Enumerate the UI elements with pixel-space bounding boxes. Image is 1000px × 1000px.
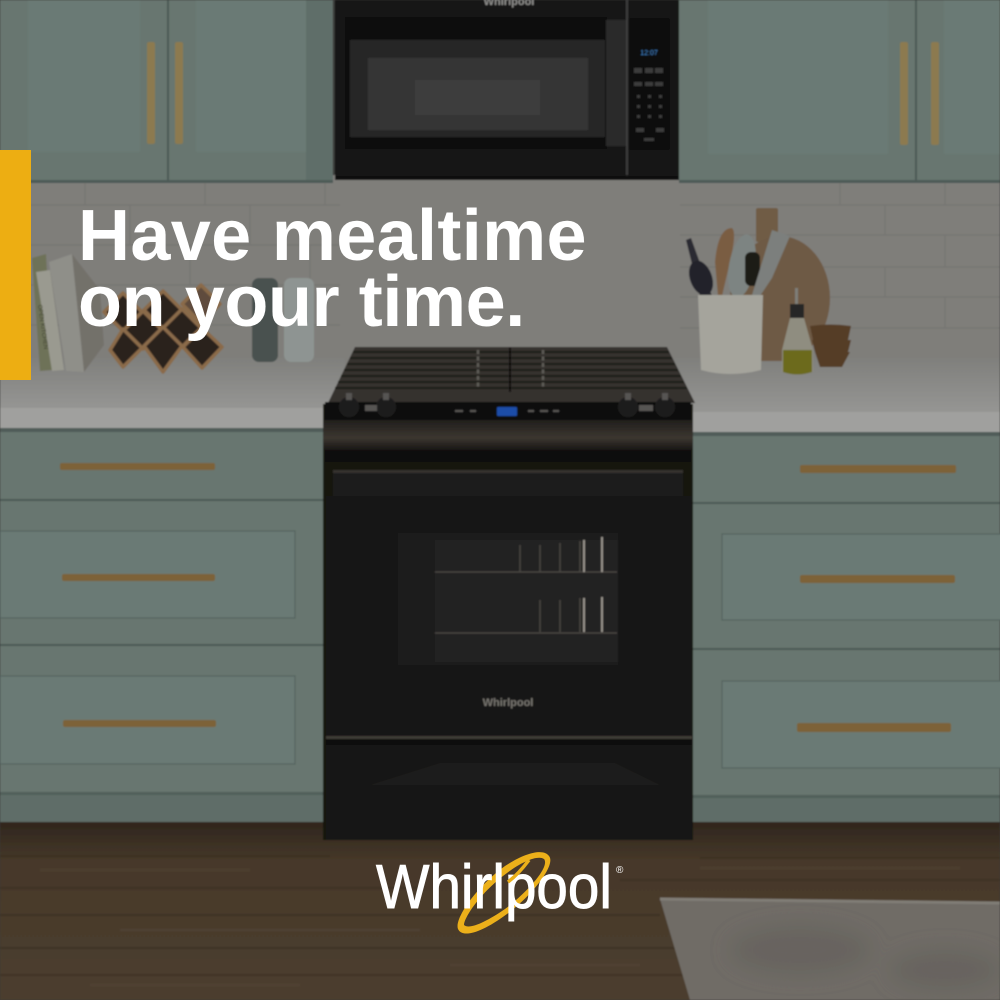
drawer handles [797, 465, 956, 732]
microwave [335, 0, 679, 180]
cooktop grates [328, 347, 695, 403]
salt and pepper mills [252, 278, 314, 362]
oil bottle [782, 288, 813, 374]
oven door logo: Whirlpool [483, 697, 533, 709]
spice rack [104, 285, 222, 372]
right counter items [685, 208, 851, 374]
oven window [398, 533, 618, 665]
left countertop [0, 358, 345, 429]
left lower cabinets [0, 428, 324, 823]
left counter items [32, 254, 314, 372]
logo swoosh back [458, 852, 550, 934]
wood floor [0, 822, 1000, 1000]
wooden bowls [810, 324, 851, 367]
cookbooks: OPEN KITCHEN [36, 304, 48, 350]
right countertop [668, 358, 1000, 432]
range [323, 347, 695, 840]
cabinet handles [147, 42, 183, 144]
registered mark: ® [616, 865, 624, 876]
utensils [685, 228, 790, 300]
backsplash tiles [0, 175, 1000, 375]
microwave window [368, 58, 588, 130]
area rug [660, 899, 1000, 1000]
upper cabinets left [0, 0, 333, 183]
right lower cabinets [692, 432, 1000, 826]
yellow accent bar [0, 150, 31, 380]
upper cabinets right [679, 0, 1000, 183]
control panel [325, 393, 691, 420]
storage drawer [326, 739, 692, 840]
utensil crock [698, 295, 763, 374]
microwave handle [606, 20, 626, 146]
oven door [326, 496, 692, 736]
logo swoosh front [508, 860, 529, 882]
cutting board [730, 208, 830, 361]
logo wordmark: Whirlpool [376, 853, 612, 922]
cabinet handles [900, 42, 939, 145]
cookbooks [32, 254, 104, 372]
Whirlpool logo [376, 852, 624, 934]
upper door band [323, 420, 693, 450]
oven display [497, 407, 517, 416]
drawer handles [60, 463, 216, 727]
headline: on your time. [78, 262, 525, 342]
burner knobs [339, 397, 675, 417]
range body [323, 404, 693, 840]
oven door handle [333, 472, 683, 496]
microwave control panel [629, 18, 670, 150]
microwave control panel: 12:07 [640, 50, 658, 57]
headline: Have mealtime [78, 196, 587, 276]
